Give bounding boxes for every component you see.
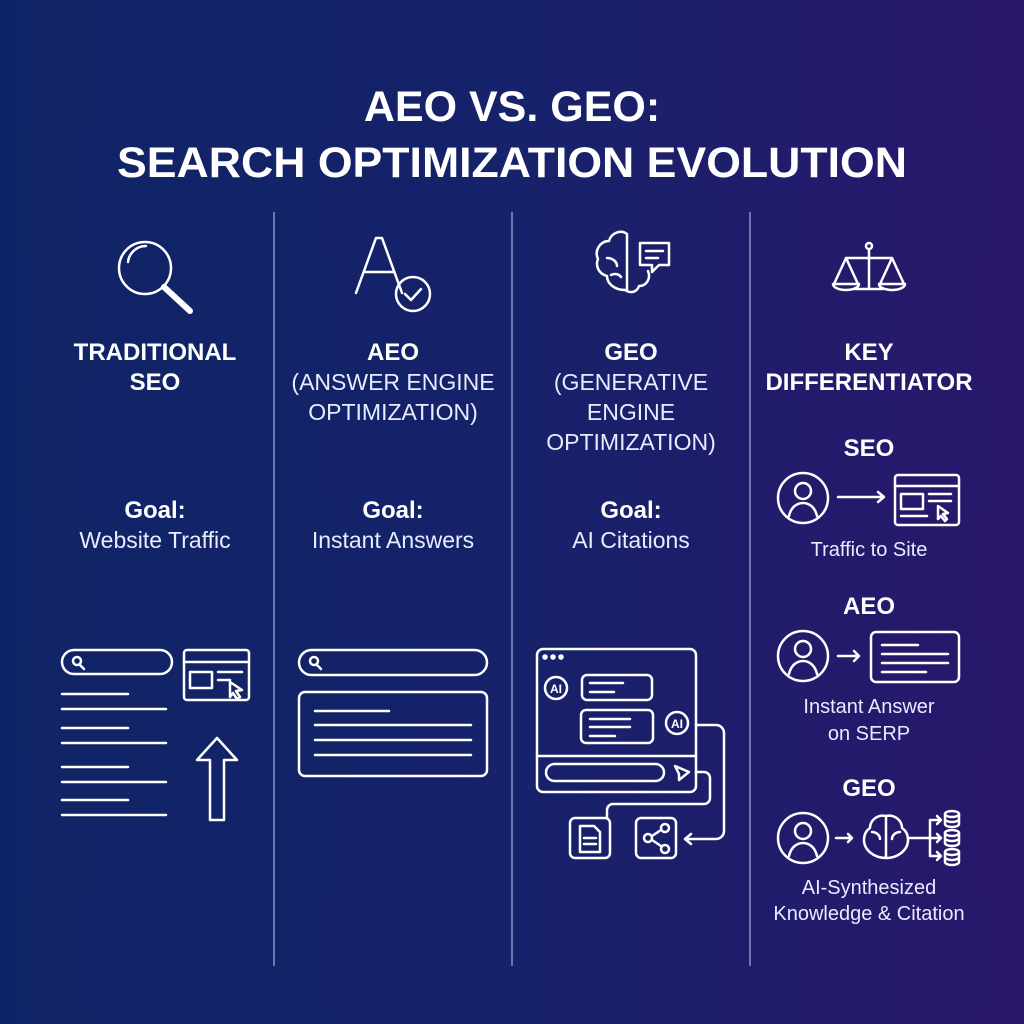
title: SEARCH OPTIMIZATION EVOLUTION: [117, 139, 907, 187]
heading: aeo: OPTIMIZATION): [308, 399, 478, 425]
illustration: search results with arrow: [62, 650, 249, 820]
panel: key differentiator: [765, 243, 973, 925]
heading: traditional seo: [74, 339, 236, 396]
icon: scales: [833, 243, 905, 290]
row: aeo: [778, 593, 959, 745]
heading: geo: ENGINE: [587, 399, 675, 425]
goal: website traffic: [79, 497, 231, 553]
illustration: ai chat with citations: AI: [671, 717, 683, 731]
icon: A with check: [356, 238, 430, 311]
heading: geo: GEO: [604, 339, 658, 366]
heading: key differentiator: DIFFERENTIATOR: [765, 369, 973, 396]
heading: aeo: AEO: [367, 339, 419, 366]
heading: traditional seo: SEO: [130, 369, 180, 396]
heading: traditional seo: TRADITIONAL: [74, 339, 236, 366]
illustration: answer box: [299, 650, 487, 776]
row: seo: [778, 435, 959, 561]
heading: geo: OPTIMIZATION): [546, 429, 716, 455]
heading: key differentiator: [765, 339, 973, 396]
goal: instant answers: Instant Answers: [312, 527, 474, 553]
goal: instant answers: Goal:: [362, 497, 424, 524]
heading: geo: (GENERATIVE: [554, 369, 708, 395]
row: geo: AI-Synthesized: [802, 877, 936, 899]
row: aeo: on SERP: [828, 723, 910, 745]
goal: ai citations: AI Citations: [572, 527, 690, 553]
goal: website traffic: Goal:: [124, 497, 186, 524]
row: seo: SEO: [844, 435, 894, 462]
goal: ai citations: Goal:: [600, 497, 662, 524]
icon: brain with chat: [597, 232, 669, 292]
heading: geo: [546, 339, 716, 455]
panel: aeo: [291, 238, 495, 776]
heading: aeo: (ANSWER ENGINE: [291, 369, 495, 395]
panel: geo: [537, 232, 724, 858]
goal: instant answers: [312, 497, 474, 553]
illustration: ai chat with citations: [537, 649, 724, 858]
row: seo: Traffic to Site: [811, 539, 927, 561]
heading: key differentiator: KEY: [844, 339, 894, 366]
goal: ai citations: [572, 497, 690, 553]
title: AEO VS. GEO:: [364, 83, 660, 131]
title: [117, 83, 907, 187]
row: geo: [773, 775, 965, 925]
row: aeo: AEO: [843, 593, 895, 620]
goal: website traffic: Website Traffic: [79, 527, 231, 553]
row: geo: GEO: [842, 775, 896, 802]
panel: traditional seo: [62, 242, 249, 820]
icon: magnifier: [119, 242, 190, 311]
illustration: ai chat with citations: AI: [550, 682, 562, 696]
heading: aeo: [291, 339, 495, 425]
row: geo: Knowledge & Citation: [773, 903, 965, 925]
row: aeo: Instant Answer: [803, 696, 935, 718]
